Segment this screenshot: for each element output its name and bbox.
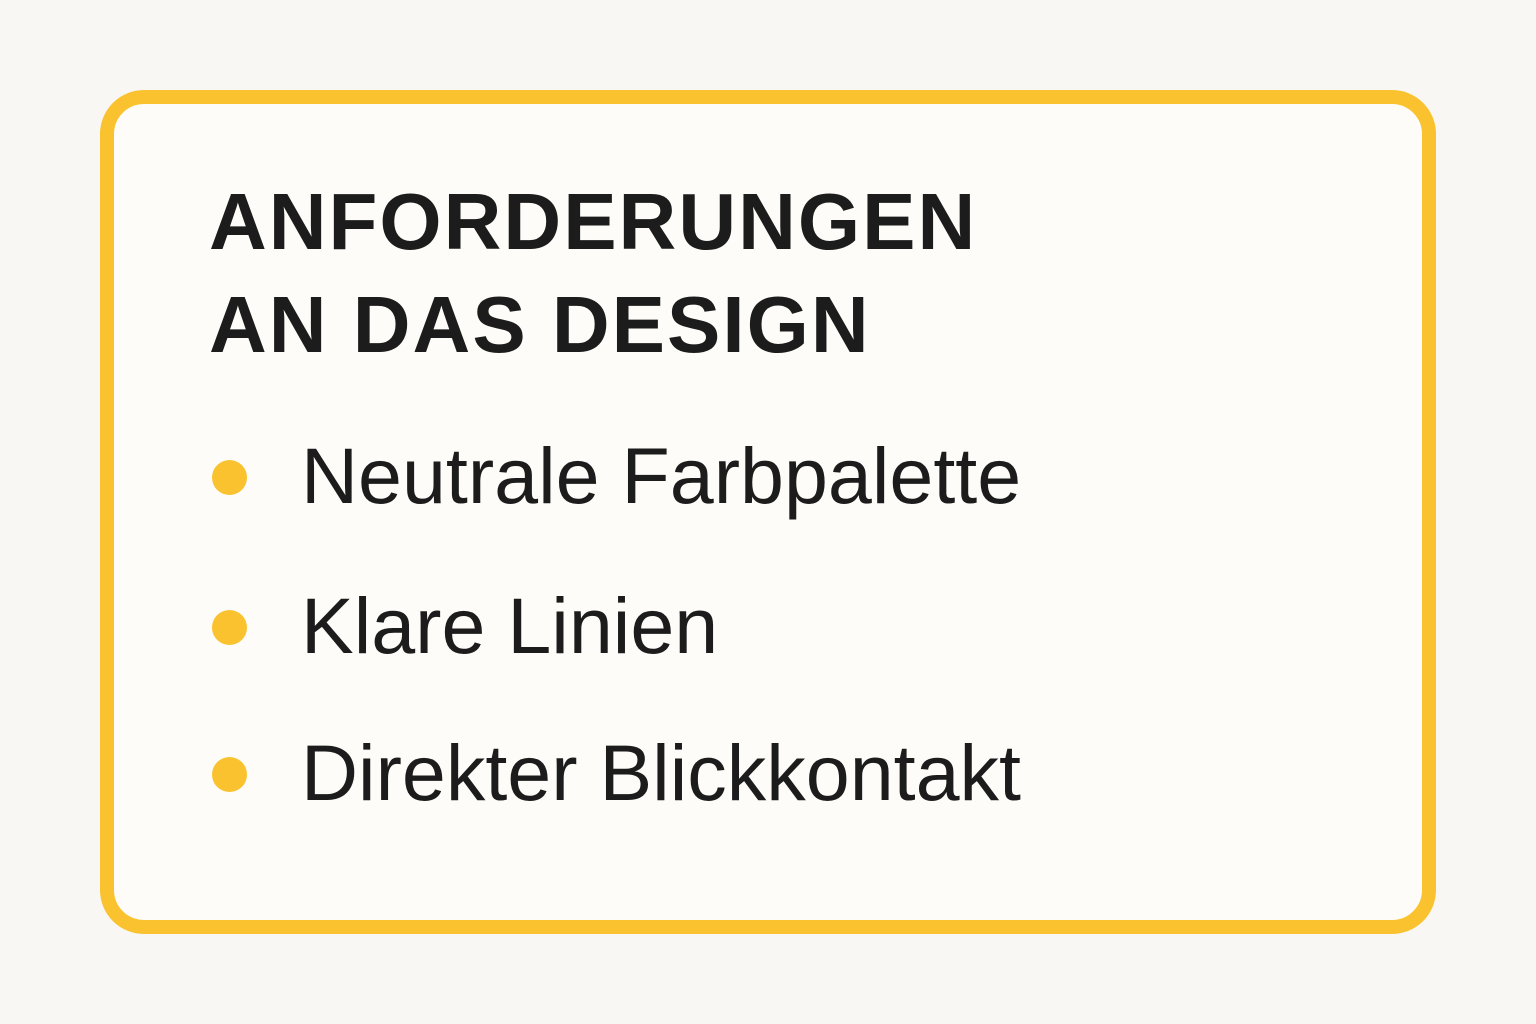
bullet: Klare Linien: Klare Linien [301,581,718,670]
title [209,177,977,369]
title: ANFORDERUNGEN [209,177,977,266]
bullet: Direkter Blickkontakt: Direkter Blickkontakt [301,728,1021,817]
panel: card [100,90,1436,934]
bullet: Neutrale Farbpalette: Neutrale Farbpalette [301,431,1021,520]
title: AN DAS DESIGN [209,280,871,369]
